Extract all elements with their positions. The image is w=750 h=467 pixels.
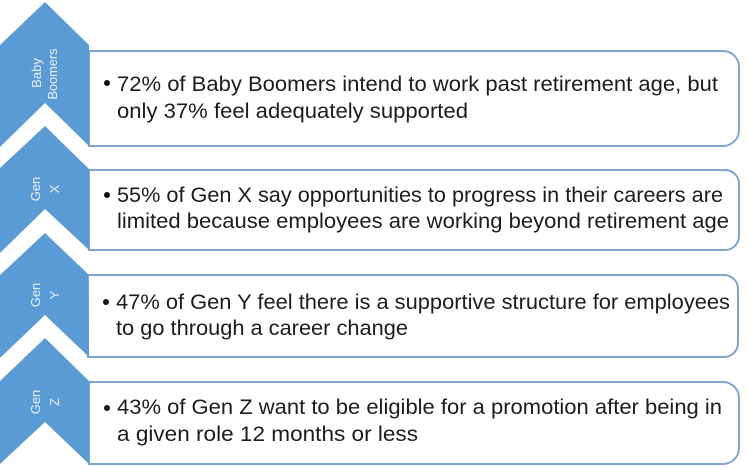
- text box: Gen X: [89, 170, 739, 250]
- panel: Gen X: [0, 126, 739, 253]
- chevron: Gen X: X: [47, 184, 62, 193]
- text box: Gen Z: [89, 382, 739, 464]
- text box: Baby Boomers: only 37% feel adequately supported: [117, 100, 468, 123]
- chevron: Gen X: [0, 126, 89, 253]
- text box: Baby Boomers: 72% of Baby Boomers intend to work past retirement age, but: [117, 73, 718, 96]
- text box: Gen Y: [88, 275, 738, 357]
- text box: Gen X: 55% of Gen X say opportunities to progress in their careers are: [117, 184, 723, 207]
- chevron: Baby Boomers: Boomers: [45, 48, 60, 100]
- chevron: Baby Boomers: Baby: [29, 58, 44, 88]
- text box: Gen Z: 43% of Gen Z want to be eligible for a promotion after being in: [117, 396, 722, 419]
- panel: Gen Z: [0, 338, 739, 464]
- panel: Baby Boomers: [0, 2, 739, 147]
- chevron: Gen Y: [0, 233, 89, 358]
- chevron: Gen Z: Z: [47, 398, 62, 406]
- chevron: Gen Z: Gen: [28, 390, 43, 414]
- text box: Gen Y: to go through a career change: [116, 317, 408, 340]
- chevron: Gen Y: Gen: [28, 283, 43, 307]
- chevron: Gen Y: Y: [47, 290, 62, 299]
- text box: Baby Boomers: [89, 51, 739, 146]
- text box: Gen X: limited because employees are working beyond retirement age: [117, 210, 729, 233]
- chevron: Gen X: Gen: [28, 177, 43, 201]
- text box: Gen Y: 47% of Gen Y feel there is a supportive structure for employees: [116, 291, 730, 314]
- panel: Gen Y: [0, 233, 738, 358]
- text box: Gen Z: a given role 12 months or less: [117, 423, 418, 446]
- chevron: Gen Z: [0, 338, 89, 464]
- chevron: Baby Boomers: [0, 2, 89, 147]
